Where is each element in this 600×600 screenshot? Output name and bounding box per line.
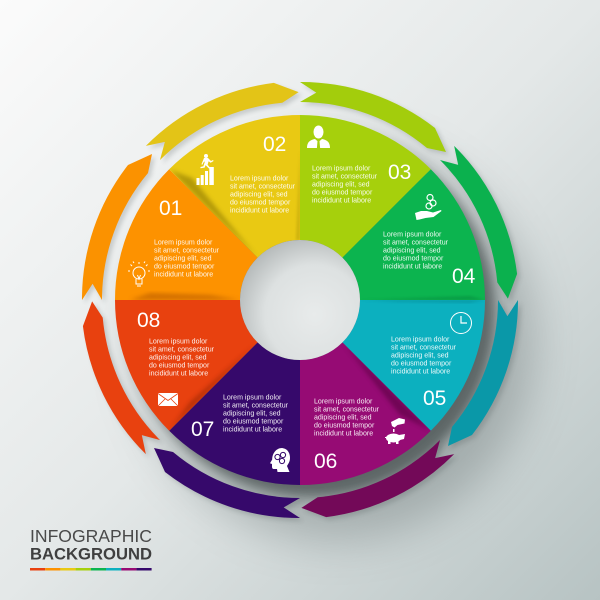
icon: piggy bank <box>385 418 405 444</box>
text block 06: adipiscing elit, sed <box>314 414 372 422</box>
text block 03: Lorem ipsum dolor <box>312 166 371 172</box>
arrow: red <box>43 301 195 454</box>
arrow: green <box>405 146 557 299</box>
text block 02: sit amet, consectetur <box>230 184 296 190</box>
text block 01: incididunt ut labore <box>154 272 213 278</box>
text block 06: Lorem ipsum dolor <box>314 398 373 406</box>
wheel cast shadow <box>129 131 535 540</box>
text block 05: adipiscing elit, sed <box>391 352 449 360</box>
ring arrows <box>43 43 560 560</box>
segment 05 content <box>391 312 472 410</box>
segment 06 magenta <box>300 342 431 485</box>
text block 07: adipiscing elit, sed <box>223 410 281 418</box>
title <box>30 526 152 570</box>
number 07: 07 <box>191 418 214 441</box>
title line 2: BACKGROUND <box>30 546 152 564</box>
text block 07: Lorem ipsum dolor <box>223 394 282 402</box>
text block 04: Lorem ipsum dolor <box>383 232 442 238</box>
number 03: 03 <box>388 161 411 184</box>
text block 04: incididunt ut labore <box>383 264 442 270</box>
segment 06 content <box>314 398 405 473</box>
icon: hand with coins <box>415 194 442 220</box>
segment 01 content <box>128 197 220 286</box>
text block 05: Lorem ipsum dolor <box>391 336 450 344</box>
arrow: teal <box>448 300 518 446</box>
icon: head with gears <box>270 448 290 472</box>
number 04: 04 <box>452 265 476 288</box>
icon: envelope <box>158 393 178 406</box>
text block 04: adipiscing elit, sed <box>383 248 441 254</box>
segment 02 content <box>196 133 296 214</box>
number 08: 08 <box>137 309 160 332</box>
arrow: lime <box>300 82 446 152</box>
text block 01: sit amet, consectetur <box>154 248 220 254</box>
segment 08 red <box>115 300 258 431</box>
icon: runner on bars <box>196 154 214 185</box>
segment 03 lime <box>300 115 431 258</box>
text block 02: incididunt ut labore <box>230 208 289 214</box>
wheel <box>115 115 485 485</box>
segment 02 yellow <box>169 115 300 258</box>
text block 05: do eiusmod tempor <box>391 360 452 368</box>
text block 02: Lorem ipsum dolor <box>230 176 289 182</box>
segment 07 content <box>191 394 290 472</box>
number 06: 06 <box>314 450 337 473</box>
text block 08: sit amet, consectetur <box>149 346 215 354</box>
text block 07: incididunt ut labore <box>223 426 282 434</box>
text block 05: sit amet, consectetur <box>391 344 457 352</box>
text block 02: adipiscing elit, sed <box>230 192 288 198</box>
rainbow bar <box>30 568 152 570</box>
title line 1: INFOGRAPHIC <box>30 526 152 546</box>
text block 05: incididunt ut labore <box>391 368 450 376</box>
arrow: magenta <box>301 405 454 557</box>
text block 02: do eiusmod tempor <box>230 200 291 206</box>
text block 01: Lorem ipsum dolor <box>154 240 213 246</box>
segment 08 content <box>137 309 215 406</box>
text block 08: adipiscing elit, sed <box>149 354 207 362</box>
text block 06: incididunt ut labore <box>314 430 373 438</box>
text block 04: sit amet, consectetur <box>383 240 449 246</box>
segment 03 content <box>307 126 411 204</box>
text block 01: do eiusmod tempor <box>154 264 215 270</box>
text block 06: sit amet, consectetur <box>314 406 380 414</box>
text block 03: do eiusmod tempor <box>312 190 373 196</box>
segment 04 content <box>383 194 476 288</box>
arrow shadows <box>46 46 560 560</box>
arrow: purple <box>154 448 300 518</box>
text block 08: incididunt ut labore <box>149 370 208 378</box>
text block 07: sit amet, consectetur <box>223 402 289 410</box>
segment 05 teal <box>342 300 485 431</box>
number 01: 01 <box>159 197 182 220</box>
arrow: yellow <box>146 43 299 195</box>
text block 03: sit amet, consectetur <box>312 174 378 180</box>
text block 03: incididunt ut labore <box>312 198 371 204</box>
text block 06: do eiusmod tempor <box>314 422 375 430</box>
segment fold shadows <box>130 150 485 430</box>
arrow: orange <box>82 154 152 300</box>
text block 03: adipiscing elit, sed <box>312 182 370 188</box>
icon: businessman <box>307 126 330 148</box>
segment 07 purple <box>169 342 300 485</box>
segment 04 green <box>342 169 485 300</box>
number 05: 05 <box>423 387 446 410</box>
center hole <box>240 240 360 360</box>
number 02: 02 <box>263 133 286 156</box>
icon: clock <box>450 312 472 334</box>
text block 08: do eiusmod tempor <box>149 362 210 370</box>
segment 01 orange <box>115 169 258 300</box>
icon: light bulb <box>128 262 150 286</box>
text block 01: adipiscing elit, sed <box>154 256 212 262</box>
text block 07: do eiusmod tempor <box>223 418 284 426</box>
text block 04: do eiusmod tempor <box>383 256 444 262</box>
text block 08: Lorem ipsum dolor <box>149 338 208 346</box>
